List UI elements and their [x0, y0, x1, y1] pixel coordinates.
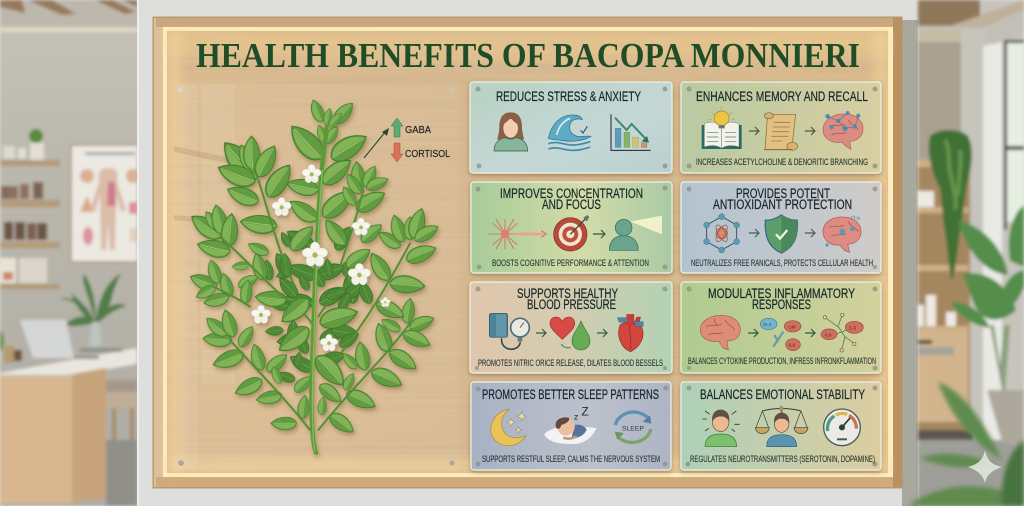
icon: molecule: [704, 214, 740, 253]
icon: cytokine molecules: D-4: [763, 322, 772, 328]
heading: REDUCES STRESS & ANXIETY: [496, 89, 641, 104]
icon: heart and drop: [550, 317, 590, 350]
wall behind the board: [137, 0, 918, 506]
icon: target: [554, 215, 589, 251]
icon: balanced cytokines: 6,8: [825, 332, 832, 337]
icon: wave: [548, 115, 591, 150]
callout: GABA and cortisol: GABA: [405, 125, 431, 136]
icon: stressed person: [702, 410, 740, 447]
icon: calm woman: [494, 112, 528, 151]
icon: cytokine molecules: UM: [788, 324, 796, 329]
panel: reduces stress and anxiety: [470, 82, 672, 173]
icon: blood pressure cuff: [489, 313, 529, 349]
icon: balanced cytokines: [821, 313, 863, 352]
icon: scroll: [764, 113, 798, 150]
heading: PROMOTES BETTER SLEEP PATTERNS: [482, 387, 659, 402]
heading: MODULATES INFLAMMATORY: [708, 286, 855, 301]
arrow: [805, 229, 815, 237]
panel: provides potent antioxidant protection: [681, 182, 881, 273]
caption: BALANCES CYTOKINE PRODUCTION, INFRESS INFRONKFLAMMATION: [688, 356, 876, 366]
icon: sleep cycle: [615, 412, 651, 442]
heading: BALANCES EMOTIONAL STABILITY: [700, 387, 865, 402]
icon: shield with check: [765, 215, 797, 253]
icon: crescent moon and stars: [491, 409, 526, 446]
icon: balanced cytokines: S-5: [849, 325, 857, 330]
heading: ENHANCES MEMORY AND RECALL: [696, 89, 868, 104]
arrow: [805, 329, 815, 337]
sparkle watermark: [968, 450, 1002, 483]
caption: REGULATES NEUROTRANSMITTERS (SEROTONIN, DOPAMINE): [690, 454, 875, 464]
heading: SUPPORTS HEALTHY: [517, 286, 618, 301]
icon: cytokine molecules: [760, 318, 801, 351]
icon: scattered laser: [488, 219, 546, 249]
arrow: [597, 329, 607, 337]
caption: PROMOTES NITRIC ORICE RELEASE, DILATES BLOOD BESSELS: [478, 358, 663, 368]
icon: cytokine molecules: IL6: [788, 343, 795, 349]
heading: AND FOCUS: [542, 197, 601, 212]
illustration: bacopa plant: [187, 98, 441, 453]
icon: sleeping person: [544, 405, 597, 444]
icon: brain: [700, 315, 740, 350]
panel: balances emotional stability: [681, 382, 881, 470]
caption: SUPPORTS RESTFUL SLEEP, CALMS THE NERVOUS SYSTEM: [482, 454, 660, 464]
icon: anatomical heart: [617, 314, 643, 352]
caption: NEUTRALIZES FREE RANICALS, PROTECTS CELLULAR HEALTH: [691, 258, 873, 268]
callout: GABA and cortisol: CORTISOL: [405, 149, 450, 160]
display board: [153, 17, 902, 488]
icon: declining chart: [611, 114, 651, 150]
heading: ANTIOXIDANT PROTECTION: [713, 197, 852, 212]
center leaves over stem: [274, 293, 360, 407]
caption: BOOSTS COGNITIVE PERFORMANCE & ATTENTION: [492, 258, 649, 268]
icon: focused person: [609, 216, 662, 250]
panel: acrylic plant panel: [173, 83, 459, 471]
arrow: [749, 229, 759, 237]
caption: INCREASES ACETYLCHOLINE & DENORITIC BRANCHING: [696, 157, 868, 167]
heading: BLOOD PRESSURE: [527, 297, 616, 312]
icon: book and light bulb: [702, 106, 742, 149]
callout: GABA and cortisol: [364, 118, 450, 162]
icon: protected brain: [823, 216, 861, 252]
arrow: [749, 127, 759, 135]
panel: improves concentration and focus: [471, 182, 672, 273]
background: clinic room left: [0, 0, 140, 506]
foreground plant: [908, 382, 1024, 506]
panel: promotes better sleep patterns: [471, 382, 671, 470]
background: room right: [918, 0, 1024, 506]
icon: sleep cycle: SLEEP: [622, 425, 645, 432]
heading: RESPONSES: [752, 297, 811, 312]
icon: sleeping person: Z: [581, 405, 589, 419]
heading: PROVIDES POTENT: [736, 186, 830, 201]
arrow: [536, 329, 546, 337]
icon: brain network: [823, 111, 863, 149]
arrow: [593, 230, 605, 238]
icon: person with scales: [755, 406, 808, 447]
icon: mood gauge: [824, 409, 860, 446]
heading: [708, 286, 855, 312]
heading: [713, 186, 852, 212]
heading: [500, 186, 643, 212]
title: HEALTH BENEFITS OF BACOPA MONNIERI: [196, 36, 860, 75]
arrow: [748, 329, 758, 337]
icon: sleeping person: z: [574, 412, 578, 422]
arrow: [805, 127, 815, 135]
panel: enhances memory and recall: [681, 82, 881, 173]
heading: [517, 286, 618, 312]
panel: modulates inflammatory responses: [681, 282, 881, 373]
heading: IMPROVES CONCENTRATION: [500, 186, 643, 201]
panel: supports healthy blood pressure: [470, 282, 672, 373]
